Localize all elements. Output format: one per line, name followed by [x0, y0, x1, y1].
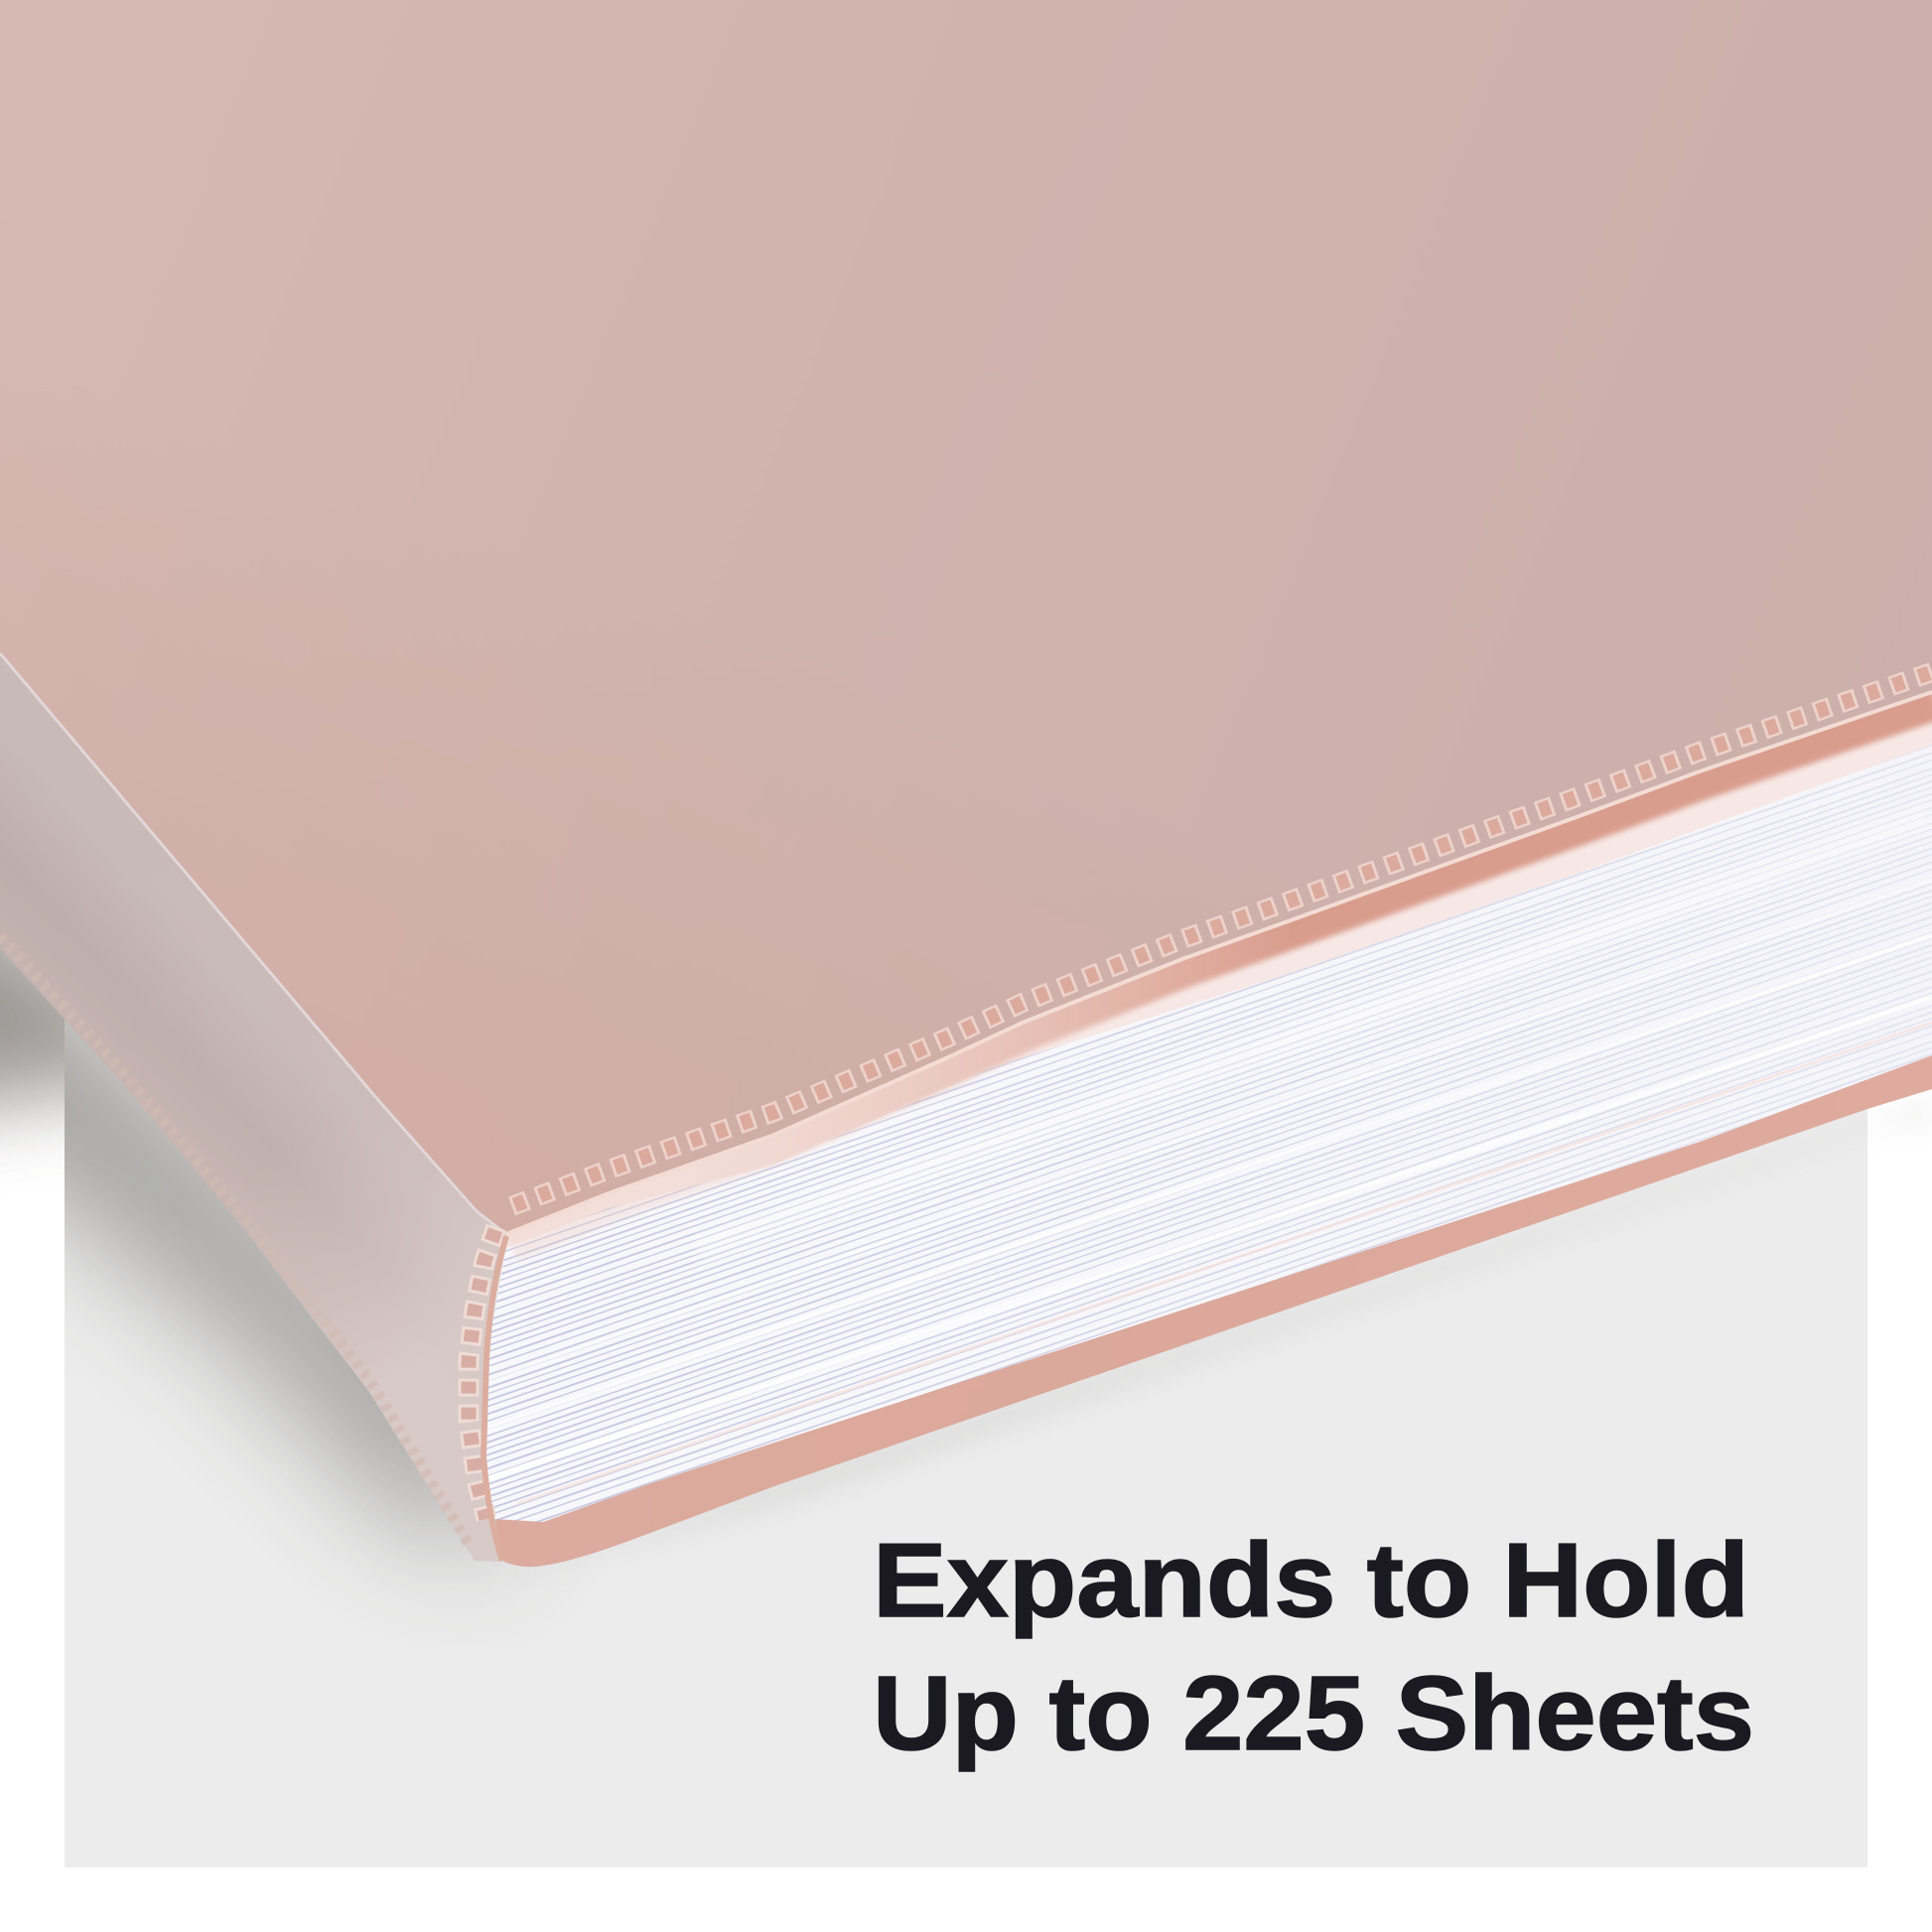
salmon inner lip [506, 692, 1932, 1234]
caption [873, 1522, 1754, 1772]
caption line 2: Up to 225 Sheets [873, 1655, 1754, 1772]
faint spine ridges [0, 936, 469, 1544]
back cover [493, 1042, 1932, 1567]
front cover with flap [0, 0, 1932, 1234]
spine corner ridges [469, 1227, 496, 1519]
spine top rim [0, 653, 506, 1234]
grey background panel [65, 874, 1867, 1867]
flap ridged seal [506, 672, 1932, 1208]
paper stack [486, 745, 1932, 1522]
flap edge highlight [506, 692, 1932, 1234]
corner side rim [483, 1236, 506, 1561]
inner pocket under flap [506, 685, 1932, 1248]
caption line 1: Expands to Hold [873, 1522, 1749, 1639]
spine side panel [0, 653, 506, 1562]
soft drop shadow under folder [0, 948, 1200, 1592]
